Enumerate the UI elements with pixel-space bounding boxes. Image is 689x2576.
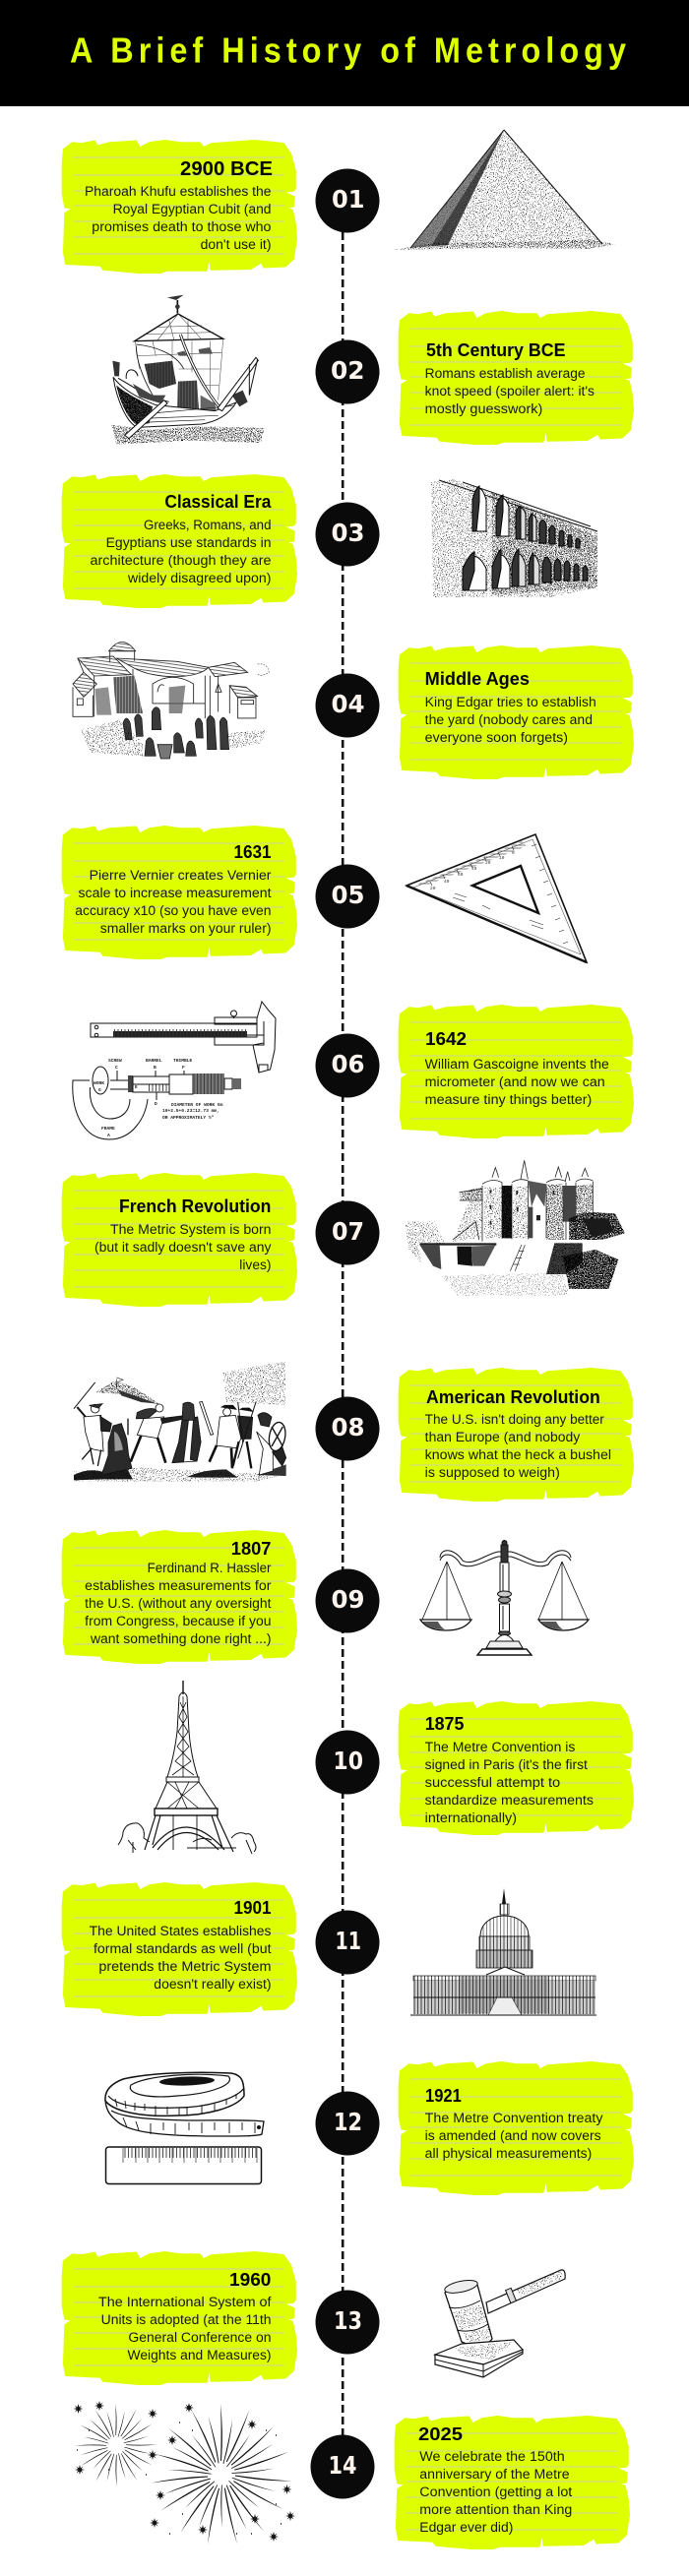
illustration: Eiffel Tower — [118, 1681, 256, 1854]
heading: 5th Century BCE — [426, 340, 565, 360]
illustration: scales of justice — [420, 1541, 589, 1655]
illustration: caliper and micrometer: SCREW — [108, 1058, 122, 1064]
illustration: measuring tape — [105, 2072, 264, 2136]
body text: smaller marks on your ruler) — [100, 921, 272, 936]
number badge 13 — [315, 2291, 380, 2354]
body text: Ferdinand R. Hassler — [148, 1561, 272, 1575]
number badge 10 — [315, 1730, 380, 1795]
body text: Royal Egyptian Cubit (and — [113, 202, 272, 216]
header band — [0, 0, 689, 106]
number badge 12: 12 — [334, 2108, 362, 2136]
number badge 05: 05 — [331, 881, 364, 909]
illustration: set square: 10 — [499, 855, 505, 861]
number badge 08 — [315, 1397, 380, 1460]
body text — [85, 184, 272, 252]
illustration: aqueduct — [431, 479, 597, 597]
heading: 1875 — [425, 1714, 464, 1734]
panel: 1875 — [399, 1702, 633, 1834]
panel: 1631 — [62, 827, 296, 958]
illustration: caliper and micrometer: B — [154, 1065, 157, 1071]
illustration: set square: 60 — [458, 872, 464, 878]
body text: than Europe (and nobody — [425, 1430, 581, 1444]
body text: mostly guesswork) — [425, 401, 542, 416]
illustration: caliper and micrometer: G — [98, 1087, 101, 1093]
body text: scale to increase measurement — [79, 886, 272, 900]
body text: Units is adopted (at the 11th — [101, 2312, 272, 2327]
heading: 1642 — [425, 1029, 467, 1049]
illustration: caliper and micrometer: A — [107, 1133, 110, 1138]
panel: American Revolution — [399, 1369, 633, 1501]
body text: General Conference on — [128, 2330, 272, 2345]
number badge 05 — [315, 864, 380, 929]
number badge 07 — [315, 1200, 380, 1265]
number badge 04 — [315, 673, 380, 738]
number badge 11: 11 — [335, 1927, 361, 1955]
illustration: caliper and micrometer: D — [155, 1101, 157, 1107]
illustration: caliper and micrometer: FRAME — [101, 1126, 115, 1132]
illustration: caliper and micrometer: WORK — [94, 1080, 104, 1086]
body text: Pierre Vernier creates Vernier — [90, 868, 272, 883]
heading: Middle Ages — [425, 669, 530, 689]
body text: Romans establish average — [425, 366, 586, 381]
heading: French Revolution — [119, 1196, 271, 1216]
body text: signed in Paris (it's the first — [425, 1757, 588, 1772]
panel: 1807 — [62, 1531, 296, 1663]
body text: knot speed (spoiler alert: it's — [425, 384, 595, 399]
number badge 09: 09 — [331, 1585, 364, 1614]
illustration: caliper and micrometer: C — [115, 1065, 118, 1071]
number badge 03: 03 — [331, 519, 364, 547]
body text: all physical measurements) — [425, 2146, 592, 2161]
body text: The Metre Convention treaty — [425, 2111, 603, 2125]
body text: (but it sadly doesn't save any — [94, 1240, 272, 1255]
panel: Classical Era — [62, 475, 296, 607]
body text: anniversary of the Metre — [419, 2467, 570, 2482]
body text — [425, 695, 596, 745]
body text: King Edgar tries to establish — [425, 695, 596, 709]
number badge 13: 13 — [334, 2306, 362, 2335]
number badge 09 — [315, 1568, 380, 1633]
body text: widely disagreed upon) — [127, 571, 272, 585]
panel: 1901 — [62, 1883, 296, 2015]
body text: Pharoah Khufu establishes the — [85, 184, 272, 199]
panel: 2025 — [395, 2417, 629, 2548]
body text — [94, 1222, 272, 1272]
illustration: caliper and micrometer: THIMBLE — [173, 1058, 193, 1064]
number badge 03 — [315, 502, 380, 567]
heading: 1901 — [234, 1898, 272, 1918]
illustration: fireworks — [73, 2401, 295, 2545]
illustration: revolution scene — [74, 1361, 287, 1482]
number badge 01 — [315, 169, 380, 232]
body text — [425, 2111, 603, 2161]
heading: 2025 — [418, 2424, 463, 2444]
illustration: ship — [111, 295, 264, 445]
panel: 2900 BCE — [62, 141, 296, 273]
illustration: caliper and micrometer: 10+2.5+0.23=12.73 mm, — [162, 1108, 219, 1114]
number badge 10: 10 — [333, 1747, 363, 1775]
illustration: pyramid — [394, 130, 615, 250]
number badge 14 — [311, 2434, 374, 2499]
body text: everyone soon forgets) — [425, 730, 568, 745]
body text: Weights and Measures) — [128, 2348, 272, 2362]
body text: knows what the heck a bushel — [425, 1447, 611, 1462]
number badge 04: 04 — [331, 690, 364, 718]
heading: 1921 — [425, 2086, 462, 2106]
illustration: medieval building scene — [73, 642, 269, 759]
body text: William Gascoigne invents the — [425, 1057, 609, 1072]
heading: 1960 — [229, 2270, 271, 2290]
panel: Middle Ages — [399, 646, 633, 778]
illustration: set square — [407, 834, 587, 962]
illustration: gavel — [435, 2270, 565, 2377]
body text — [75, 868, 272, 936]
number badge 06 — [315, 1033, 380, 1098]
body text: accuracy x10 (so you have even — [75, 903, 272, 918]
illustration: set square: 40 — [444, 879, 450, 885]
body text — [98, 2295, 272, 2362]
number badge 11 — [315, 1911, 380, 1974]
heading: 2900 BCE — [180, 157, 273, 180]
title: A Brief History of Metrology — [70, 31, 626, 71]
body text: measure tiny things better) — [425, 1092, 592, 1107]
body text: promises death to those who — [92, 219, 272, 234]
illustration: Capitol building — [410, 1888, 596, 2015]
panel: 1960 — [62, 2252, 296, 2384]
illustration: caliper and micrometer: DIAMETER OF WORK Gm — [171, 1102, 223, 1108]
body text: The International System of — [98, 2295, 272, 2309]
body text: We celebrate the 150th — [419, 2449, 565, 2464]
number badge 12 — [315, 2092, 380, 2155]
timeline dashed line — [342, 232, 344, 2440]
heading: American Revolution — [426, 1387, 600, 1407]
illustration: castle — [406, 1160, 625, 1296]
body text: Edgar ever did) — [419, 2520, 513, 2535]
number badge 01: 01 — [332, 185, 364, 214]
body text: don't use it) — [201, 237, 272, 252]
body text: micrometer (and now we can — [425, 1074, 605, 1089]
body text: is amended (and now covers — [425, 2128, 601, 2143]
body text: want something done right ...) — [90, 1631, 271, 1646]
illustration: caliper and micrometer: BARREL — [146, 1058, 162, 1064]
heading: Classical Era — [164, 492, 272, 512]
body text: doesn't really exist) — [154, 1977, 272, 1992]
body text: pretends the Metric System — [98, 1959, 272, 1974]
body text — [425, 1740, 594, 1825]
illustration: set square: 0 — [512, 850, 515, 856]
body text: the U.S. (without any oversight — [85, 1596, 272, 1611]
body text: from Congress, because if you — [85, 1614, 272, 1628]
body text — [91, 518, 272, 585]
illustration: caliper and micrometer — [73, 1002, 276, 1139]
panel: 1921 — [399, 2062, 633, 2194]
number badge 02 — [315, 340, 380, 403]
body text: establishes measurements for — [85, 1578, 272, 1593]
illustration: set square: 40 — [471, 866, 477, 872]
body text: internationally) — [425, 1810, 517, 1825]
illustration: caliper and micrometer: E — [135, 1084, 138, 1090]
body text: standardize measurements — [425, 1793, 594, 1808]
body text — [425, 366, 595, 416]
panel: 1642 — [399, 1006, 633, 1137]
illustration: set square: 20 — [485, 860, 491, 866]
body text: The Metre Convention is — [425, 1740, 576, 1754]
body text: the yard (nobody cares and — [425, 712, 593, 727]
body text: lives) — [239, 1257, 272, 1272]
body text: Greeks, Romans, and — [144, 518, 272, 532]
illustration: caliper and micrometer: OR APPROXIMATELY ½" — [162, 1115, 215, 1121]
body text: successful attempt to — [425, 1775, 560, 1790]
panel: 5th Century BCE — [399, 312, 633, 444]
body text: Convention (getting a lot — [419, 2484, 573, 2499]
number badge 06: 06 — [331, 1050, 364, 1078]
body text: The U.S. isn't doing any better — [425, 1412, 604, 1427]
body text — [85, 1561, 272, 1646]
body text — [90, 1924, 272, 1992]
body text: more attention than King — [419, 2502, 572, 2517]
illustration: ruler — [106, 2147, 262, 2184]
heading: 1631 — [234, 842, 272, 862]
body text: Egyptians use standards in — [106, 535, 271, 550]
body text: architecture (though they are — [91, 553, 272, 568]
number badge 02: 02 — [331, 356, 364, 385]
body text — [425, 1057, 609, 1107]
body text — [419, 2449, 573, 2535]
heading: 1807 — [231, 1539, 271, 1559]
body text: The Metric System is born — [110, 1222, 272, 1237]
illustration: set square: 20 — [430, 886, 436, 891]
body text — [425, 1412, 611, 1480]
body text: is supposed to weigh) — [425, 1465, 560, 1480]
number badge 14: 14 — [329, 2451, 356, 2480]
number badge 07: 07 — [332, 1217, 364, 1246]
panel: French Revolution — [62, 1174, 296, 1306]
number badge 08: 08 — [331, 1413, 364, 1441]
illustration: caliper and micrometer: F — [182, 1065, 185, 1071]
body text: formal standards as well (but — [94, 1941, 272, 1956]
body text: The United States establishes — [90, 1924, 272, 1938]
